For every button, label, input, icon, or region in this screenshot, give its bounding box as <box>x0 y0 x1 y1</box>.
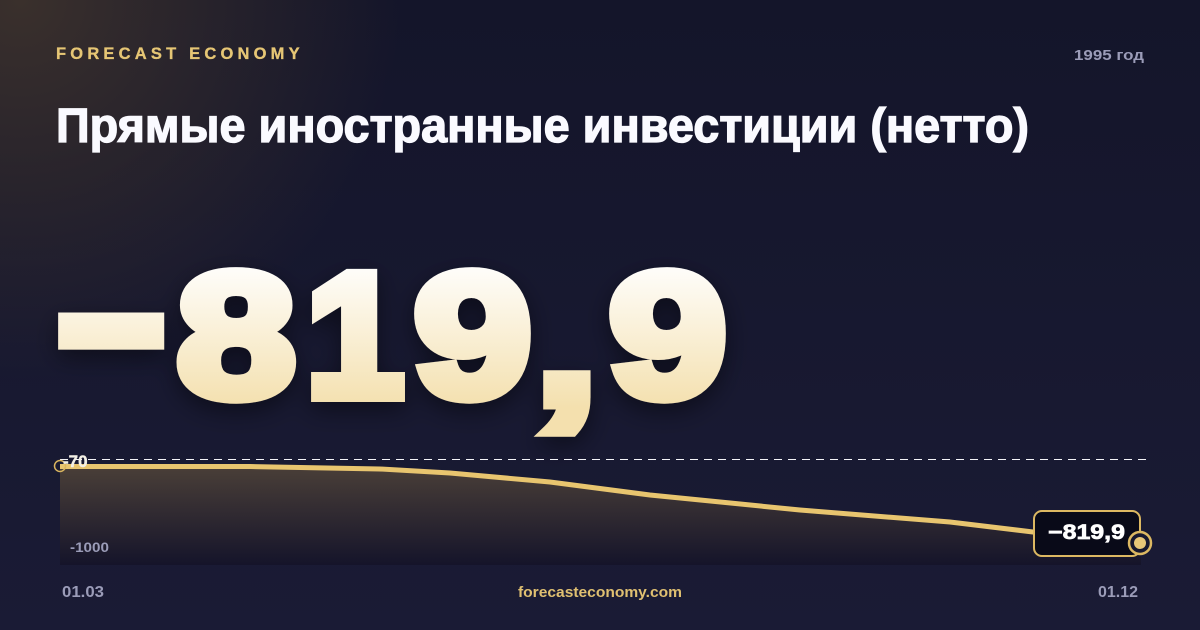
reference dashed line <box>60 458 1146 460</box>
big value: 1 <box>306 238 404 434</box>
start date: 01.03 <box>62 584 104 601</box>
area under line <box>60 466 1141 565</box>
big value <box>67 237 726 441</box>
end date: 01.12 <box>1098 584 1138 601</box>
site url: forecasteconomy.com <box>518 584 682 601</box>
big value: 8 <box>177 237 295 434</box>
big value: , <box>536 245 597 441</box>
brand label: FORECAST ECONOMY <box>56 45 304 63</box>
year label: 1995 год <box>1074 47 1145 64</box>
big value: 9 <box>609 238 726 434</box>
value callout: −819,9 <box>1048 521 1125 544</box>
title: Прямые иностранные инвестиции (нетто) <box>56 100 1029 153</box>
sparkline chart <box>54 452 1151 565</box>
top axis label: -70 <box>63 452 88 471</box>
start marker <box>54 460 66 472</box>
line series <box>60 466 1141 544</box>
end marker <box>1129 532 1151 554</box>
big value: − <box>67 262 155 396</box>
bottom axis label: -1000 <box>70 539 109 555</box>
value callout <box>1034 511 1140 556</box>
big value: 9 <box>414 238 531 434</box>
